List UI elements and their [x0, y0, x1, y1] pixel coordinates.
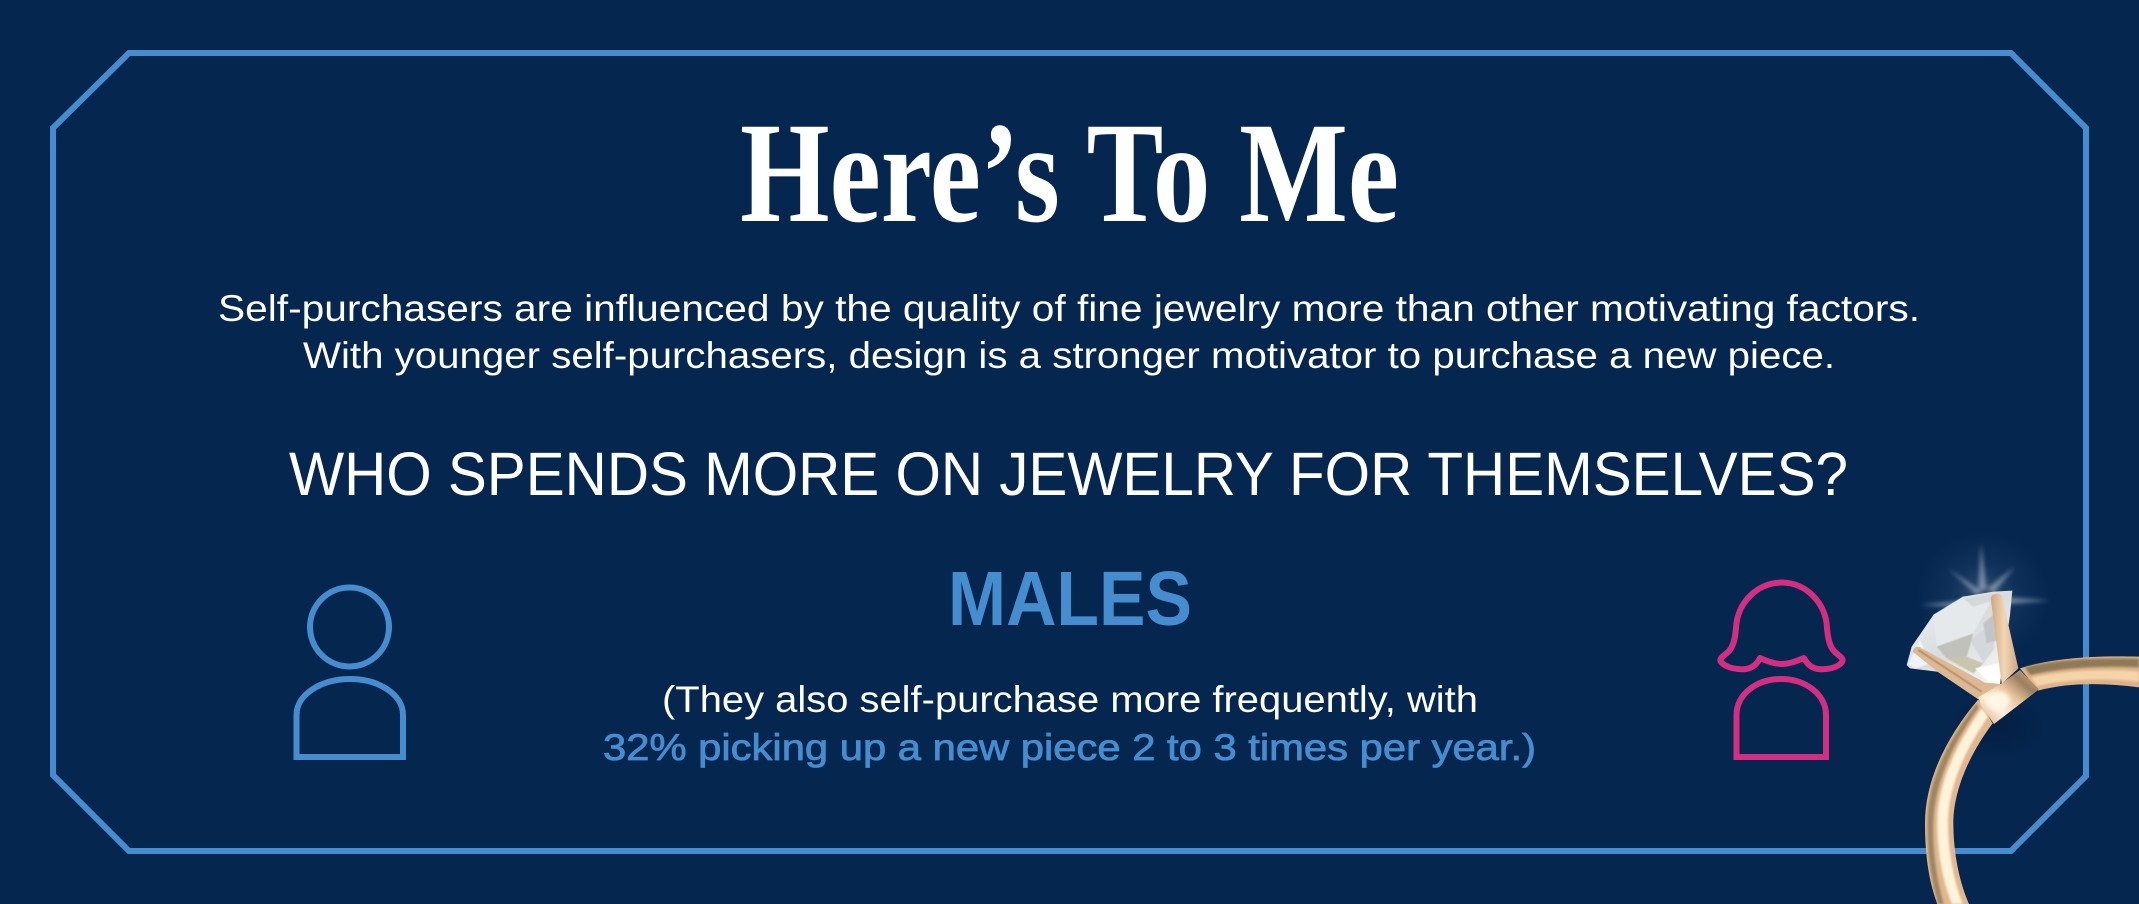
intro text: With younger self-purchasers, design is a stronger motivator to purchase a new piece. [303, 335, 1835, 376]
question heading: WHO SPENDS MORE ON JEWELRY FOR THEMSELVES? [289, 440, 1848, 508]
illustration: diamond ring [1907, 530, 2139, 904]
diamond glow [1917, 530, 2050, 663]
ring band left [1925, 699, 1993, 904]
supporting note: 32% picking up a new piece 2 to 3 times per year.) [603, 727, 1536, 768]
ring shadow [1947, 693, 2047, 760]
prongs [1913, 594, 2018, 699]
answer: males: MALES [948, 556, 1192, 642]
supporting note: (They also self-purchase more frequently, with [662, 679, 1478, 720]
icon: male figure [296, 588, 403, 757]
icon: female figure [1720, 582, 1843, 757]
title: Here’s To Me [740, 94, 1399, 253]
diamond [1907, 591, 2012, 684]
supporting note [603, 679, 1536, 768]
intro text: Self-purchasers are influenced by the quality of fine jewelry more than other motivating factors. [218, 288, 1920, 329]
ring head [1978, 670, 2039, 724]
intro text [218, 288, 1920, 376]
ring band right [2020, 656, 2139, 691]
